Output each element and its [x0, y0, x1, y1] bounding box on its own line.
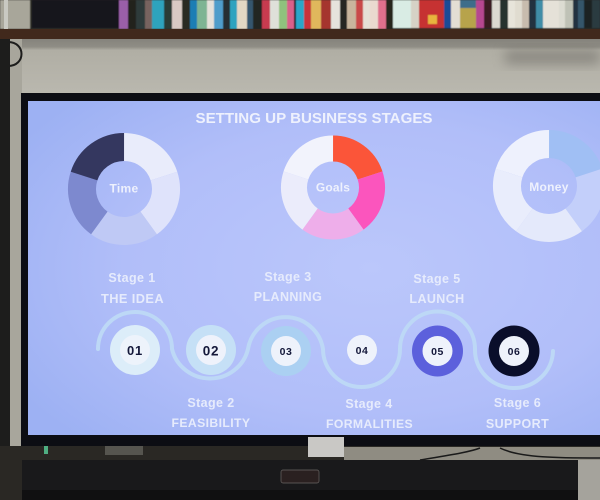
stage 1 marker: 01 — [127, 343, 143, 358]
label: stage 4: FORMALITIES — [326, 417, 413, 431]
stage 3 marker: 03 — [280, 346, 292, 358]
label: stage 4 — [326, 397, 413, 431]
donut label: Money: Money — [529, 180, 569, 194]
label: stage 5 — [409, 272, 465, 306]
donut label: Time: Time — [110, 182, 139, 196]
label: stage 5: LAUNCH — [409, 292, 465, 306]
label: stage 1: THE IDEA — [101, 291, 164, 306]
stage 5 marker: 05 — [431, 346, 444, 358]
TV bezel — [21, 93, 600, 446]
donut label: Goals: Goals — [316, 180, 350, 194]
label: stage 4: Stage 4 — [345, 397, 393, 411]
label: stage 6 — [486, 396, 549, 431]
wave timeline line — [98, 312, 553, 388]
title: SETTING UP BUSINESS STAGES — [196, 111, 433, 127]
label: stage 3: PLANNING — [254, 290, 322, 304]
stage 3 marker — [261, 326, 311, 376]
label: stage 3: Stage 3 — [264, 270, 312, 284]
stage 5 marker — [412, 326, 463, 376]
label: stage 6: SUPPORT — [486, 417, 549, 431]
wooden shelf — [0, 29, 600, 39]
label: stage 6: Stage 6 — [494, 396, 541, 410]
donut chart: Money — [490, 127, 600, 245]
stage 2 marker: 02 — [203, 344, 219, 358]
label: stage 1 — [101, 271, 164, 306]
stage 1 marker — [110, 325, 160, 375]
label: stage 2: Stage 2 — [187, 396, 235, 410]
bookshelf with books — [0, 0, 600, 29]
label: stage 2: FEASIBILITY — [172, 416, 250, 430]
label: stage 2 — [172, 396, 250, 430]
donut chart: Time — [65, 130, 183, 248]
cabinet and soundbar — [0, 446, 600, 500]
stage 6 marker: 06 — [508, 346, 520, 358]
donut chart: Goals — [279, 133, 387, 242]
label: stage 1: Stage 1 — [108, 271, 156, 285]
stage 6 marker — [488, 326, 540, 376]
TV screen — [28, 101, 600, 435]
wall pipe — [0, 0, 22, 469]
stage 2 marker — [186, 325, 236, 375]
label: stage 5: Stage 5 — [413, 272, 461, 286]
stage 4 marker — [347, 335, 377, 365]
stage 4 marker: 04 — [356, 345, 368, 357]
label: stage 3 — [254, 270, 322, 304]
TV stand foot — [308, 437, 344, 457]
